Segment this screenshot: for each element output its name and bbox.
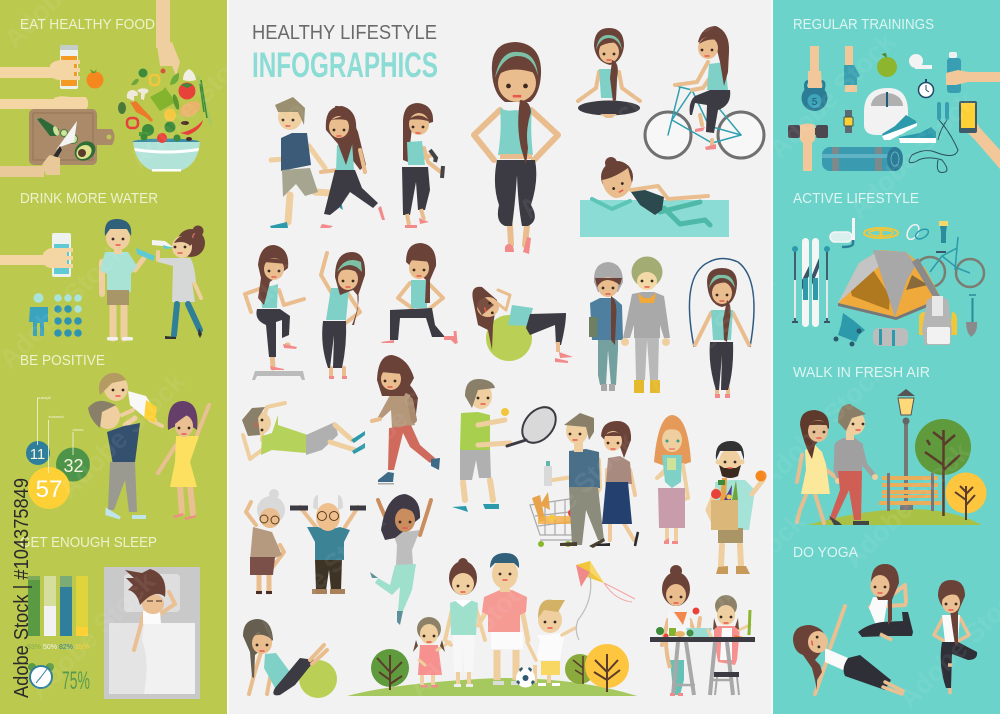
chart: bubble statistics: 32 [63, 456, 84, 476]
illustration: woman sleeping in bed [104, 567, 200, 699]
icon: yoga mat [822, 147, 903, 171]
chart: sleep percentage bars: 15% [75, 644, 89, 651]
illustration: dancing woman in yellow dress [158, 401, 209, 520]
icon: carabiners [905, 223, 930, 241]
street lamp [897, 389, 915, 510]
chart: sleep percentage bars [27, 576, 89, 651]
figure: family in park [347, 553, 637, 696]
figure: woman running [320, 106, 385, 228]
icon: sneakers [882, 115, 936, 143]
icon: roller skate [834, 313, 865, 346]
figure: woman stepping on platform [245, 245, 305, 380]
heading: active lifestyle: ACTIVE LIFESTYLE [793, 190, 919, 207]
stock watermarks: Adobe Stock [643, 266, 782, 404]
figure: couple shopping with cart [530, 413, 638, 548]
figure: redhead with drink [654, 415, 691, 544]
chart: bubble statistics: donec [73, 427, 83, 432]
kite [576, 561, 635, 640]
figure: mother and daughter cooking [650, 565, 755, 696]
icon: sleeping mat [873, 328, 908, 346]
stock watermarks: Adobe Stock [503, 426, 642, 564]
figure: woman skipping rope [689, 258, 754, 398]
illustration: cutting board with cucumber, knife and avocado [0, 96, 114, 177]
icon: bicycle [915, 237, 984, 287]
tree yellow [946, 472, 986, 520]
chart: sleep percentage bars: 93% [27, 644, 41, 651]
stock watermarks: Adobe Stock [513, 86, 652, 224]
ground hill [807, 509, 982, 525]
icon: tent [838, 250, 942, 320]
figure: woman jumping with arms raised [370, 494, 431, 625]
icon: stopwatch [918, 79, 934, 98]
icon: dumbbell in hand [788, 124, 828, 171]
icon: climbing rope [864, 228, 898, 238]
boy [527, 600, 575, 686]
figure: woman on exercise ball [472, 287, 573, 363]
icon: water bottle in hand [946, 52, 1000, 93]
icon: skis and poles [792, 238, 830, 327]
icon: bathroom scale [864, 88, 908, 135]
tree green [915, 419, 971, 516]
trees autumn [565, 644, 629, 692]
heading: be positive: BE POSITIVE [20, 352, 105, 369]
illustration: juice in hand and orange [0, 45, 104, 89]
icon: hand with kettlebell [802, 46, 828, 111]
man in sweater [829, 404, 878, 525]
panel: right teal column [773, 0, 1000, 714]
figure: woman ice skating [372, 355, 440, 484]
illustration: glass of water in hand [0, 233, 73, 277]
illustration: couple walking in park [797, 389, 986, 525]
figure: seated yoga pose [858, 564, 913, 640]
illustration: woman drinking from bottle [152, 226, 205, 339]
figure: woman swimming [580, 157, 729, 237]
heading: get enough sleep: GET ENOUGH SLEEP [20, 534, 157, 551]
chart: bubble statistics: 11 [30, 446, 45, 463]
figure: hiking couple [589, 256, 670, 393]
illustration: man drinking from bottle [100, 219, 155, 340]
icon: backpack [919, 296, 957, 345]
icon: alarm clock with 75 percent: 75% [62, 667, 90, 695]
icon: flashlight [939, 221, 948, 243]
icon: alarm clock with 75 percent [28, 663, 90, 695]
figure: grandfather with dumbbells [290, 495, 366, 594]
stock watermarks: Adobe Stock [253, 506, 392, 644]
stock watermarks: Adobe Stock [53, 366, 192, 504]
figure: bearded man with grocery bag [708, 441, 766, 574]
chart: bubble statistics: suscipit [37, 395, 52, 400]
panel: left green column [0, 0, 227, 714]
father [478, 553, 528, 685]
figure: woman with legs on ball [243, 619, 337, 698]
stock watermarks: Adobe Stock [233, 186, 372, 324]
soccer ball [516, 667, 535, 688]
stock watermarks: Adobe Stock [673, 506, 812, 644]
stock watermarks: Adobe Stock [333, 346, 472, 484]
heading: eat healthy food: EAT HEALTHY FOOD [20, 16, 155, 33]
figure: woman doing lunge [381, 243, 458, 344]
chart: bubble statistics: euismod [48, 414, 64, 419]
chart: sleep percentage bars: 50% [43, 644, 57, 651]
stock watermarks: Adobe Stock [23, 566, 162, 704]
icon: measuring tape [909, 54, 932, 69]
stock watermarks: Adobe Stock [253, 16, 392, 154]
chart: bubble statistics [26, 395, 90, 509]
illustration: father lifting child [88, 373, 162, 518]
panel: center light column [242, 22, 766, 698]
figure: woman meditating [578, 28, 640, 118]
figure: woman with dumbbells [402, 103, 443, 228]
heading: drink more water: DRINK MORE WATER [20, 190, 158, 207]
figure: tree pose yoga [934, 580, 977, 694]
stock watermarks: Adobe Stock [753, 356, 892, 494]
figure: woman stretching arm up [321, 252, 365, 379]
icon: snorkel mask [830, 218, 855, 247]
illustration: salad bowl with vegetables [118, 68, 211, 172]
figure: woman riding bicycle [645, 26, 764, 158]
figure: man playing tennis [452, 379, 563, 512]
icon: hand with kettlebell: 5 [812, 97, 818, 108]
figure: grandmother exercising [246, 489, 285, 594]
woman in dress [797, 410, 838, 523]
vertical stock id label: Adobe Stock | #104375849 [11, 478, 33, 698]
divider strip [227, 0, 228, 714]
figure: side plank yoga [793, 606, 903, 694]
chart: bubble statistics: 57 [36, 476, 62, 503]
heading: walk in fresh air: WALK IN FRESH AIR [793, 364, 930, 381]
heading: infographics: INFOGRAPHICS [252, 46, 438, 85]
heading: healthy lifestyle: HEALTHY LIFESTYLE [252, 22, 437, 44]
icon: phone in hand [959, 101, 1000, 169]
stock watermarks: Adobe Stock [843, 86, 982, 224]
illustration: hand reaching from top [156, 0, 180, 76]
stock watermarks: Adobe Stock [838, 436, 977, 574]
little girl [413, 617, 450, 688]
stock watermarks: Adobe Stock [763, 26, 902, 164]
icon: apple [877, 53, 897, 77]
mother [445, 558, 485, 687]
icon: skipping rope [909, 102, 958, 172]
figure: man doing crunches [242, 403, 365, 459]
figure: large woman with headband [474, 42, 558, 254]
stock watermarks: Adobe Stock [403, 566, 542, 704]
icon: shovel [966, 295, 977, 337]
icon: person and water drops [29, 293, 82, 337]
icon: gloved hand [844, 46, 860, 92]
icon: fitness watch [844, 110, 853, 133]
park bench [879, 473, 941, 511]
chart: sleep percentage bars: 82% [59, 644, 73, 651]
figure: man running [270, 97, 343, 228]
heading: do yoga: DO YOGA [793, 544, 858, 561]
heading: regular trainings: REGULAR TRAININGS [793, 16, 934, 33]
stock watermarks: Adobe Stock [123, 36, 262, 174]
tree green [371, 649, 409, 690]
divider strip right [772, 0, 773, 714]
